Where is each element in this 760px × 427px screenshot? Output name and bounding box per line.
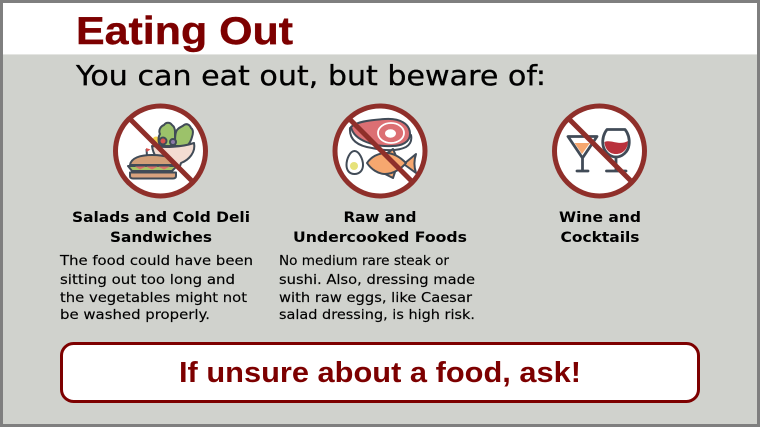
heading: raw foods xyxy=(293,210,467,246)
icon: no wine and cocktails xyxy=(554,106,644,196)
callout xyxy=(62,344,698,402)
text: raw foods: salad dressing, is high risk. xyxy=(279,307,475,323)
heading: salads: Sandwiches xyxy=(110,230,212,246)
subtitle: You can eat out, but beware of: xyxy=(75,60,546,92)
heading: wine: Cocktails xyxy=(560,230,640,246)
text: raw foods: with raw eggs, like Caesar xyxy=(279,290,472,306)
egg xyxy=(346,151,363,174)
heading: wine: Wine and xyxy=(559,210,641,226)
text: salads: The food could have been xyxy=(59,253,253,269)
fish xyxy=(367,149,416,178)
text: raw foods xyxy=(279,253,475,323)
text: raw foods: sushi. Also, dressing made xyxy=(279,272,475,288)
heading: raw foods: Undercooked Foods xyxy=(293,230,467,246)
cocktail glass xyxy=(568,136,597,171)
header band xyxy=(3,3,757,54)
callout: If unsure about a food, ask! xyxy=(179,357,581,389)
text: salads: sitting out too long and xyxy=(60,272,235,288)
text: raw foods: No medium rare steak or xyxy=(279,253,449,269)
text: salads xyxy=(59,253,253,323)
icon: no raw meat and fish xyxy=(335,106,425,196)
text: salads: the vegetables might not xyxy=(60,290,247,306)
heading: salads: Salads and Cold Deli xyxy=(72,210,250,226)
heading: salads xyxy=(72,210,250,246)
prohibition ring xyxy=(116,106,206,196)
wine glass xyxy=(603,130,629,171)
steak xyxy=(350,119,411,150)
heading: wine xyxy=(559,210,641,246)
heading: raw foods: Raw and xyxy=(344,210,416,226)
icon: no salads and sandwiches xyxy=(116,106,206,196)
text: salads: be washed properly. xyxy=(60,307,210,323)
title: Eating Out xyxy=(76,10,293,53)
salad bowl xyxy=(152,123,194,166)
prohibition ring xyxy=(554,106,644,196)
sandwich xyxy=(128,149,177,178)
prohibition ring xyxy=(335,106,425,196)
